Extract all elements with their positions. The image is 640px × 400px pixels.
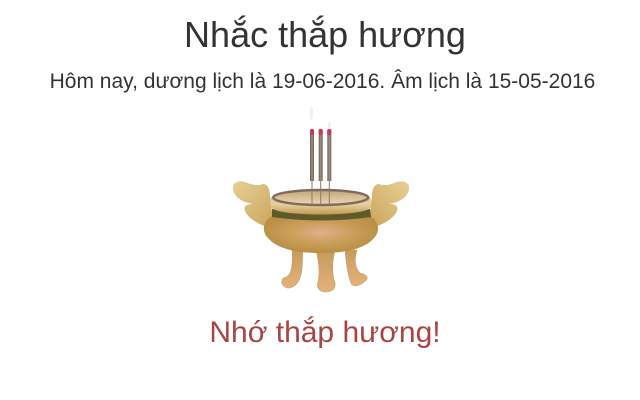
smoke wisps [310,106,331,128]
title: Nhắc thắp hương [184,14,466,55]
burner body [264,216,378,253]
right handle [368,181,409,228]
incense sticks [310,129,331,205]
dark neck band [272,209,371,220]
subtitle: date line: Hôm nay, dương lịch là 19-06-2016. Âm lịch là 15-05-2016 [50,70,595,93]
rim opening [273,190,368,205]
rim outer [270,190,371,214]
left handle [233,181,274,228]
icon: incense burner [232,106,410,292]
legs [282,250,367,292]
reminder message: Nhớ thắp hương! [209,316,441,349]
